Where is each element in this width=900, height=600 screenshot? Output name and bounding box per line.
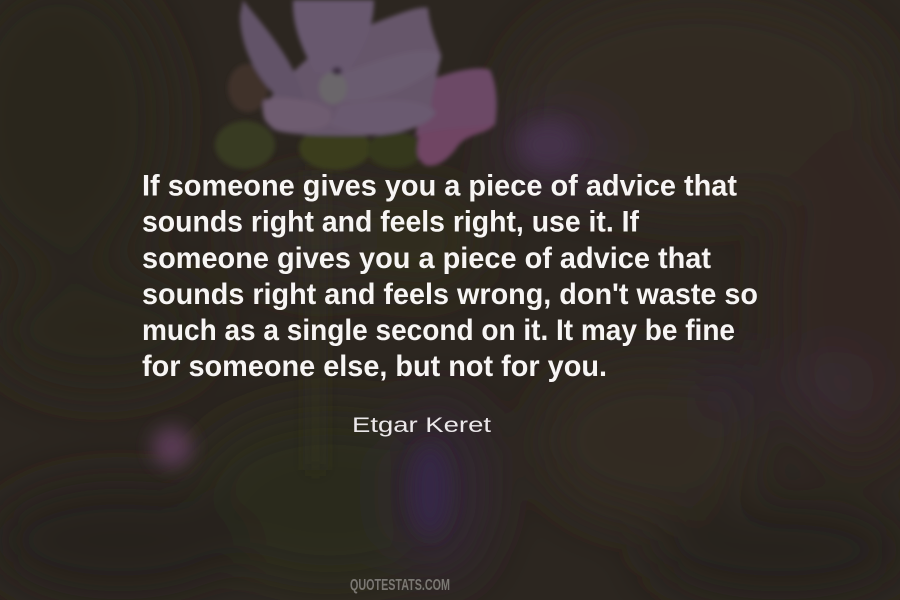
flower illustration bbox=[215, 0, 497, 170]
quote text: If someone gives you a piece of advice that bbox=[142, 170, 737, 202]
quote text bbox=[142, 170, 758, 383]
buds bbox=[215, 121, 275, 169]
author: Etgar Keret bbox=[352, 414, 491, 437]
quote text: sounds right and feels right, use it. If bbox=[142, 206, 640, 238]
main petals bbox=[265, 7, 441, 135]
side petals bbox=[415, 68, 497, 136]
flower centre bbox=[319, 72, 347, 104]
quote text: for someone else, but not for you. bbox=[142, 350, 607, 383]
quote text: much as a single second on it. It may be fine bbox=[142, 314, 735, 347]
quote text: sounds right and feels wrong, don't waste so bbox=[142, 278, 758, 311]
quote text: someone gives you a piece of advice that bbox=[142, 242, 711, 275]
watermark: QUOTESTATS.COM bbox=[350, 577, 450, 594]
